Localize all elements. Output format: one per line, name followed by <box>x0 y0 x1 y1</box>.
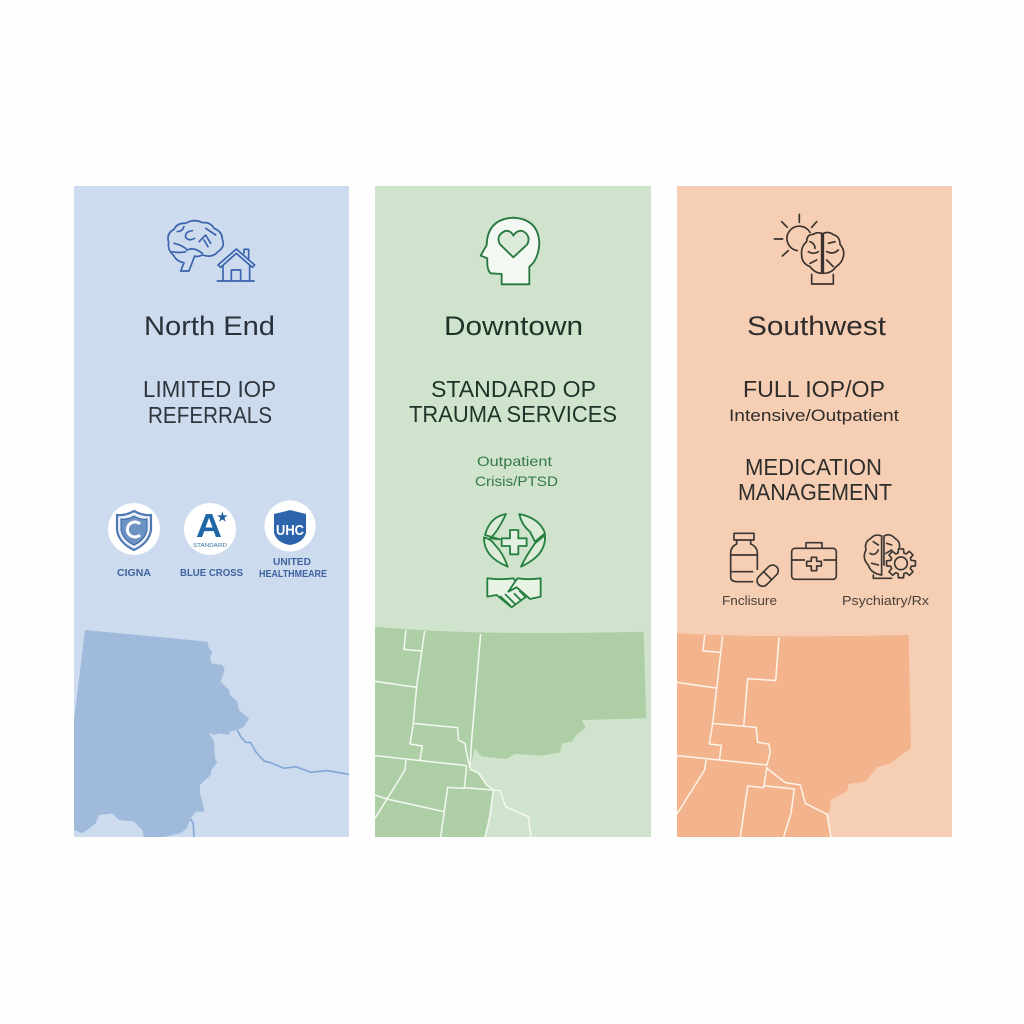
insurer: Cigna <box>108 503 160 579</box>
label: Fnclisure: Fnclisure <box>722 594 777 608</box>
sub text: Outpatient Crisis/PTSD: Crisis/PTSD <box>475 473 558 489</box>
service text: Limited IOP referrals: LIMITED IOP <box>143 376 276 402</box>
service text: Limited IOP referrals: REFERRALS <box>148 402 272 428</box>
panel: North End <box>74 186 349 837</box>
North End panel background <box>74 186 349 837</box>
service text: Standard OP trauma services: STANDARD OP <box>431 376 596 402</box>
icon: sun and brain <box>774 214 844 284</box>
heading: Southwest: Southwest <box>747 311 887 341</box>
Downtown panel background <box>375 186 651 837</box>
map: Southwest region <box>677 633 911 837</box>
insurer: Blue Cross: A <box>196 507 222 544</box>
map: North End region <box>74 630 349 837</box>
service text: Full IOP/OP <box>729 376 899 425</box>
insurer: Cigna: CIGNA <box>117 567 151 579</box>
label: Psychiatry/Rx: Psychiatry/Rx <box>842 593 930 608</box>
icon: medicine bottle and capsule <box>731 533 781 589</box>
map: Downtown region <box>375 627 646 837</box>
heading: North End: North End <box>144 311 275 341</box>
heading: Downtown: Downtown <box>444 311 583 341</box>
service text: Limited IOP referrals <box>143 376 276 428</box>
insurer: United Healthcare: UNITED <box>273 556 311 568</box>
icon: caring hands with cross <box>484 514 545 567</box>
icon: brain and house <box>168 221 255 281</box>
insurer: Blue Cross: ★ <box>217 510 228 524</box>
service text: Medication management: MEDICATION <box>745 454 882 480</box>
icon: head with heart <box>481 218 539 284</box>
sub text: Outpatient Crisis/PTSD <box>475 453 558 489</box>
icon: brain with gear <box>864 535 915 578</box>
insurer: United Healthcare: HEALTHMEARE <box>259 568 327 580</box>
service text: Full IOP/OP: Intensive/Outpatient <box>729 406 899 425</box>
service text: Standard OP trauma services <box>409 376 617 427</box>
sub text: Outpatient Crisis/PTSD: Outpatient <box>477 453 552 469</box>
Southwest panel background <box>677 186 952 837</box>
panel: Southwest <box>677 186 952 837</box>
service text: Medication management <box>738 454 892 505</box>
panel: Downtown <box>375 186 651 837</box>
icon: first aid kit <box>792 543 836 579</box>
icon: handshake <box>487 578 541 607</box>
insurer: United Healthcare: UHC <box>276 522 304 539</box>
insurer: Blue Cross: STANDARD <box>193 543 227 549</box>
service text: Standard OP trauma services: TRAUMA SERVICES <box>409 401 617 427</box>
insurer: Blue Cross: BLUE CROSS <box>180 567 243 579</box>
insurer: United Healthcare <box>259 500 327 580</box>
service text: Full IOP/OP: FULL IOP/OP <box>743 376 885 402</box>
service text: Medication management: MANAGEMENT <box>738 479 892 505</box>
insurer: Blue Cross <box>180 503 243 579</box>
